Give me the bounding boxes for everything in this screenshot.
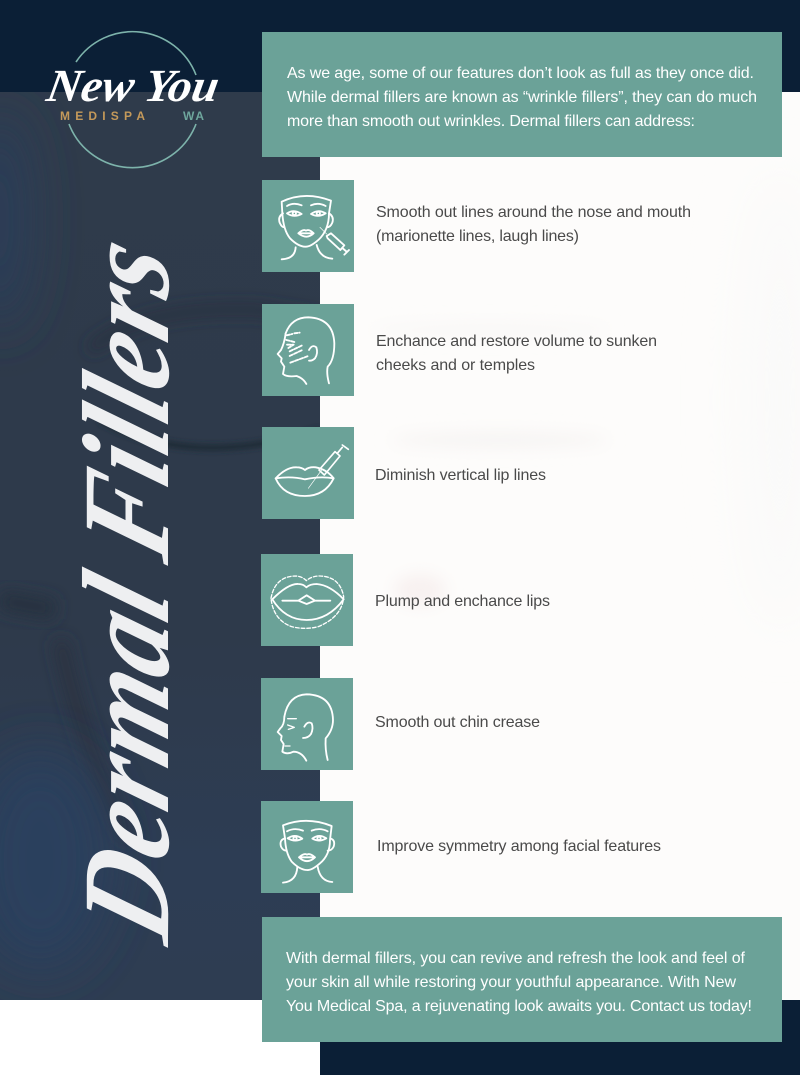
logo ring [69, 32, 196, 168]
item 1 text: (marionette lines, laugh lines) [376, 228, 579, 245]
item 6 icon: face [261, 801, 353, 893]
item 5 text: Smooth out chin crease [375, 714, 540, 731]
item 2 text: cheeks and or temples [376, 357, 535, 374]
item 4 text: Plump and enchance lips [375, 593, 550, 610]
item 4 icon: plumped lips [261, 554, 353, 646]
navy top band [0, 0, 800, 92]
logo wa: WA [183, 109, 204, 123]
navy bottom band [320, 1000, 800, 1075]
logo [42, 32, 223, 168]
item 2 icon: head profile with dashed lines [262, 304, 354, 396]
item 5 icon: head profile [261, 678, 353, 770]
item 1 text: Smooth out lines around the nose and mouth [376, 204, 691, 221]
dark photo panel: left [0, 92, 320, 1000]
closing text: your skin all while restoring your youthful appearance. With New [286, 974, 736, 991]
logo medispa: MEDISPA [60, 109, 145, 123]
intro text: While dermal fillers are known as “wrinkle fillers”, they can do much [287, 89, 757, 106]
item 1 icon: face with syringe [262, 180, 354, 272]
item 3 text: Diminish vertical lip lines [375, 467, 546, 484]
intro text: As we age, some of our features don’t look as full as they once did. [287, 65, 754, 82]
intro text: more than smooth out wrinkles. Dermal fillers can address: [287, 113, 695, 130]
item 6 text: Improve symmetry among facial features [377, 838, 661, 855]
intro panel [262, 32, 782, 157]
vertical title: Dermal Fillers [58, 221, 195, 957]
closing panel [262, 917, 782, 1042]
closing text: You Medical Spa, a rejuvenating look awaits you. Contact us today! [286, 998, 752, 1015]
item 2 text: Enchance and restore volume to sunken [376, 333, 657, 350]
closing text: With dermal fillers, you can revive and refresh the look and feel of [286, 950, 746, 967]
faded photo panel: right [395, 433, 576, 608]
logo wordmark: New You [42, 61, 223, 112]
item 3 icon: lips with syringe [262, 427, 354, 519]
